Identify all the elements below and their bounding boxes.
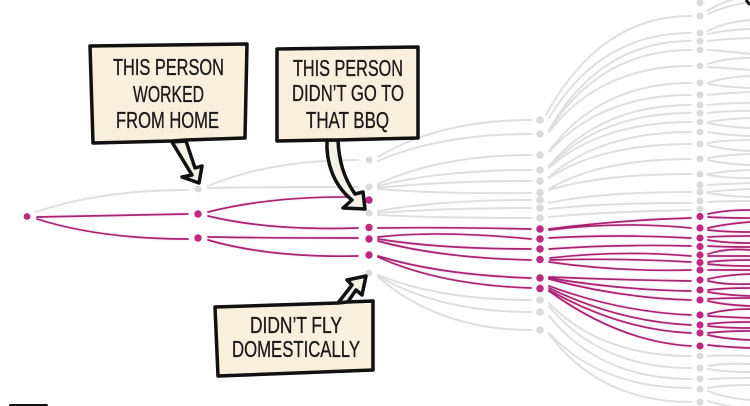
callout text: DIDN’T GO TO	[292, 80, 404, 106]
callout: did not go to BBQ	[277, 47, 418, 209]
callout text: THAT BBQ	[306, 107, 389, 133]
callout text	[292, 55, 404, 133]
callout text	[113, 54, 224, 133]
callout text: THIS PERSON	[113, 54, 224, 80]
magenta branches: people infected	[37, 197, 750, 348]
grey nodes	[194, 0, 704, 406]
callout box	[90, 44, 247, 143]
callout text: FROM HOME	[116, 107, 219, 133]
callout text: WORKED	[133, 81, 204, 107]
callout box	[215, 301, 373, 376]
arrow: to BBQ node	[327, 140, 365, 209]
callout text: DOMESTICALLY	[232, 336, 360, 362]
cropped box edge bottom left	[9, 404, 48, 406]
callout: worked from home	[90, 44, 247, 183]
arrow: to domestic flight node	[338, 276, 366, 303]
magenta nodes	[24, 196, 704, 350]
callout: did not fly domestically	[215, 276, 373, 376]
arrow: to worked-from-home node	[172, 141, 202, 183]
callout box	[277, 47, 418, 141]
callout text	[232, 312, 360, 362]
callout text: DIDN’T FLY	[250, 312, 342, 338]
cropped box corner top right	[746, 0, 750, 5]
callout text: THIS PERSON	[293, 55, 403, 81]
